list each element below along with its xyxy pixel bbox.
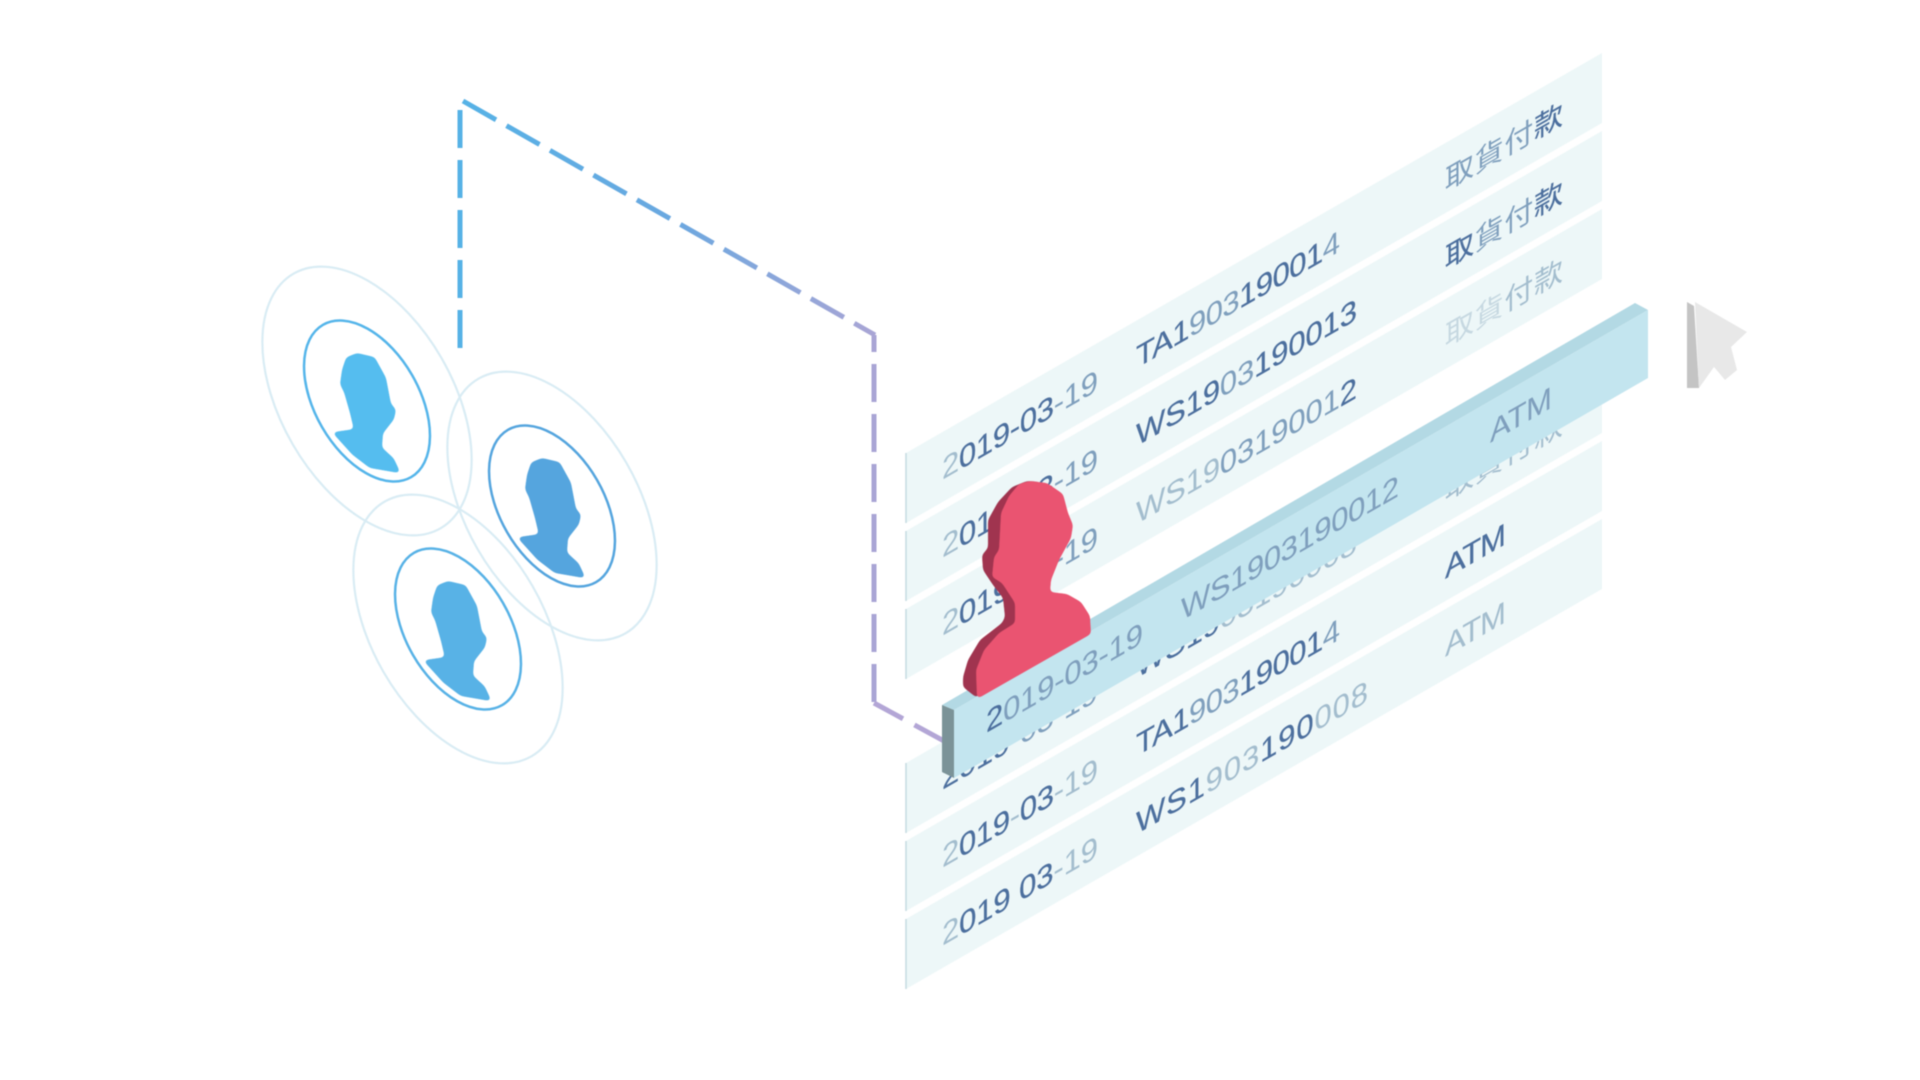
- row 5: ATM: [1445, 517, 1506, 586]
- highlighted row text: ATM: [1490, 380, 1552, 450]
- row 6: [906, 519, 1602, 989]
- row 4: 2019-03-19: [942, 673, 1098, 797]
- row 5: TA1903190014: [1136, 612, 1340, 764]
- row 4: [906, 363, 1602, 833]
- red person icon: [963, 481, 1091, 699]
- row 2: WS1903190013: [1136, 293, 1357, 454]
- row 5: 2019-03-19: [942, 751, 1098, 875]
- row 1: 取貨付款: [1445, 97, 1563, 197]
- cursor icon: [1687, 302, 1747, 388]
- row 1: TA1903190014: [1136, 224, 1340, 376]
- row 3: 取貨付款: [1445, 253, 1563, 353]
- row 5: [906, 441, 1602, 911]
- row 3: 2019-03-19: [942, 519, 1098, 643]
- row 1: [906, 53, 1602, 523]
- row 2: 取貨付款: [1445, 175, 1563, 275]
- highlighted row text: WS1903190012: [1181, 469, 1399, 628]
- highlighted row text: [986, 380, 1552, 740]
- user circle 3: [310, 459, 606, 799]
- table: transaction rows: [906, 53, 1602, 989]
- user group: three profile circles: [219, 231, 700, 799]
- row 2: [906, 131, 1602, 601]
- row 6: ATM: [1445, 595, 1506, 664]
- row 3: [906, 209, 1602, 679]
- row 6: 2019 03-19: [942, 829, 1098, 953]
- row 4: WS1903190008: [1136, 525, 1357, 686]
- row 4: 取貨付款: [1445, 407, 1563, 507]
- row 6: WS1903190008: [1136, 674, 1368, 842]
- user circle 2: [404, 336, 700, 676]
- highlighted row text: 2019-03-19: [986, 616, 1143, 740]
- row 3: WS1903190012: [1136, 371, 1357, 532]
- row 1: 2019-03-19: [942, 363, 1098, 487]
- row 2: 2019-03-19: [942, 441, 1098, 565]
- user circle 1: [219, 231, 515, 571]
- highlighted row bar: [942, 303, 1648, 778]
- dashed connector line: [460, 101, 944, 741]
